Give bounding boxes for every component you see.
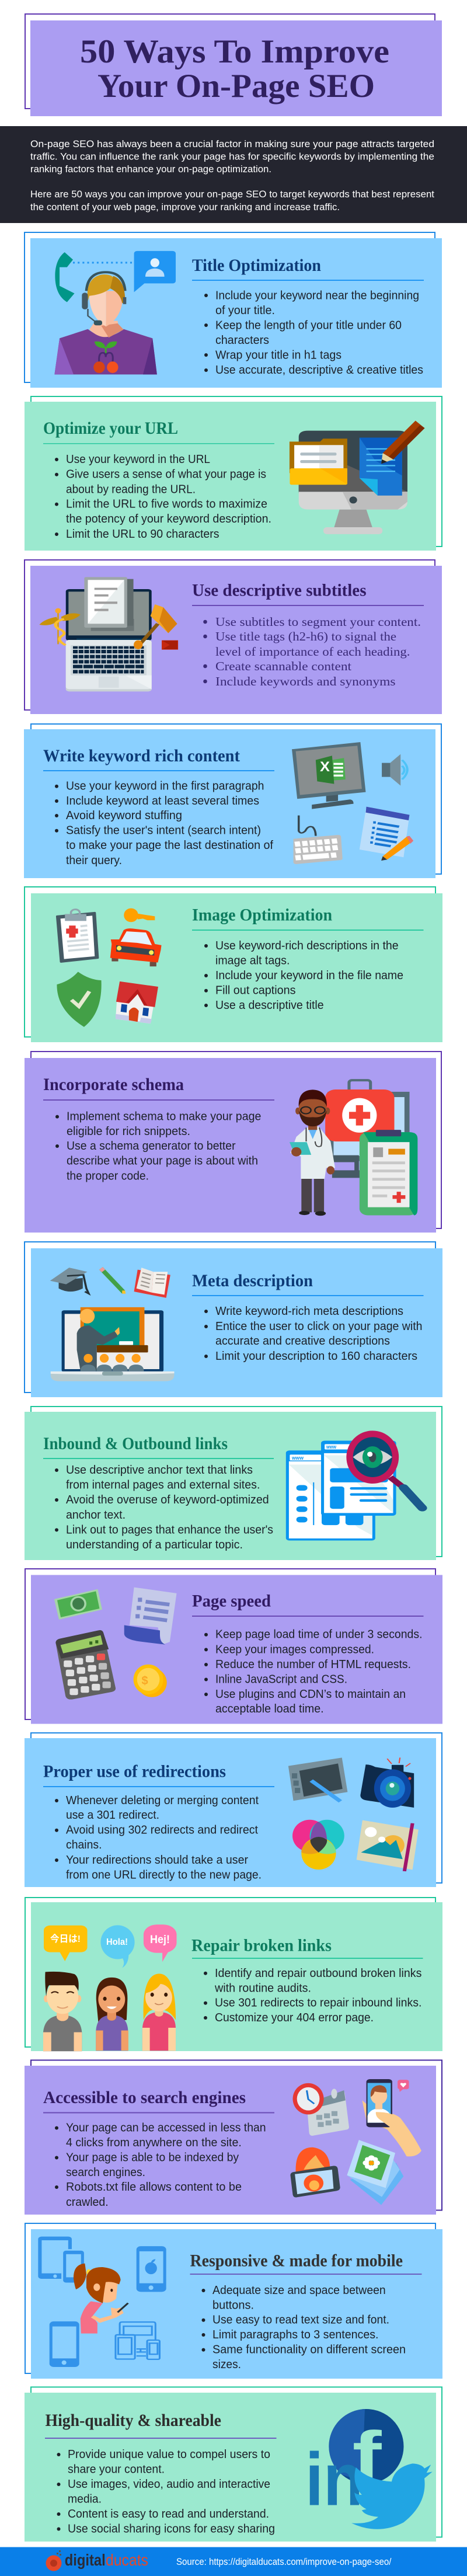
bullet list: Use images, video, audio and interactive [68,2478,270,2491]
bullet list: to make your page the last destination of [66,839,273,852]
icon: laptop with document, caduceus and gavel [39,577,178,691]
panel: Inbound & Outbound links [25,1407,442,1560]
icon labels: www [291,1444,337,1461]
panel: Repair broken links [25,1898,442,2051]
bullet list: Limit your description to 160 characters [215,1350,417,1363]
heading: Use descriptive subtitles [192,580,367,600]
bullet list: Use 301 redirects to repair inbound links. [215,1997,421,2010]
title: Your On-Page SEO [97,68,375,105]
bullet list: search engines. [66,2166,145,2179]
bullet list: of your title. [215,304,275,317]
title [80,33,389,105]
speech bubble text: 今日は! [50,1933,81,1944]
bullet list: about by reading the URL. [66,483,196,496]
bullet list [203,615,421,688]
bullet list: Avoid the overuse of keyword-optimized [66,1494,269,1506]
logo: digitalducats: ducats [106,2551,148,2569]
bullet list: Identify and repair outbound broken links [215,1967,421,1980]
bullet list: understanding of a particular topic. [66,1538,243,1551]
bullet list [55,1464,273,1551]
speech bubble text: Hej! [150,1934,170,1946]
bullet list: Customize your 404 error page. [215,2011,374,2024]
bullet list: sizes. [212,2358,241,2371]
bullet list: Entice the user to click on your page with [215,1320,423,1333]
bullet list: Give users a sense of what your page is [66,468,266,481]
bullet list: Use your keyword in the first paragraph [66,780,264,793]
heading: Accessible to search engines [43,2088,246,2107]
bullet list: image alt tags. [215,955,290,967]
icon: doctor with medical kit and clipboard [290,1080,417,1216]
footer bar [0,2547,467,2576]
bullet list [202,2284,406,2371]
bullet list: Adequate size and space between [212,2284,386,2297]
bullet list: Your page is able to be indexed by [66,2151,239,2164]
bullet list [55,2122,266,2209]
bullet list: Use plugins and CDN’s to maintain an [215,1688,406,1701]
intro text: the content of your web page, improve your ranking and increase traffic. [30,201,340,213]
bullet list [55,1111,261,1183]
bullet list: Inline JavaScript and CSS. [215,1673,347,1686]
header panel [25,14,442,116]
title: 50 Ways To Improve [80,33,389,70]
icon: three people with speech bubbles [43,1924,177,2051]
bullet list: chains. [66,1839,102,1851]
bullet list [204,1628,423,1715]
bullet list: Implement schema to make your page [67,1111,261,1123]
bullet list: Limit the URL to five words to maximize [66,498,267,511]
bullet list: eligible for rich snippets. [67,1125,190,1138]
bullet list: Use title tags (h2-h6) to signal the [215,629,396,643]
bullet list: acceptable load time. [215,1703,324,1715]
icon: money, receipt, calculator and coin [54,1588,177,1700]
icon: monitor, speaker, keyboard and notepad [292,742,413,864]
bullet list: with routine audits. [214,1982,311,1994]
heading: Repair broken links [191,1936,332,1955]
bullet list: Provide unique value to compel users to [68,2448,270,2461]
bullet list: Use keyword-rich descriptions in the [215,939,399,952]
bullet list [55,780,273,867]
heading: Proper use of redirections [43,1762,226,1781]
bullet list [204,289,423,377]
bullet list: Use a schema generator to better [67,1140,236,1153]
speech bubble text: Hola! [106,1937,128,1947]
bullet list: Limit paragraphs to 3 sentences. [212,2328,378,2341]
bullet list: Your redirections should take a user [66,1854,248,1867]
icon: monitor with folder, document and pencil [290,420,425,534]
heading: Inbound & Outbound links [43,1434,228,1453]
icon: support agent with phone [54,251,176,374]
icon: drawing tablet, camera, colour venn and picture [288,1757,419,1871]
bullet list: Use easy to read text size and font. [212,2314,389,2327]
panel: Title Optimization [25,232,442,388]
bullet list: Use your keyword in the URL [66,453,210,466]
intro band [0,126,467,223]
logo: digitalducats [46,2550,148,2571]
icon: girl with mobile devices [38,2237,166,2367]
panel: Optimize your URL [25,396,442,551]
bullet list: Content is easy to read and understand. [68,2508,269,2521]
bullet list: Include your keyword near the beginning [215,289,419,302]
icon: facebook, linkedin and twitter logos: in [305,2438,363,2522]
heading: High-quality & shareable [46,2411,221,2430]
panel: Responsive & made for mobile [25,2223,442,2379]
bullet list: characters [215,334,269,347]
panel: Write keyword rich content [24,724,441,878]
panel: Accessible to search engines [25,2060,442,2215]
bullet list: 4 clicks from anywhere on the site. [66,2136,242,2149]
bullet list: share your content. [68,2463,165,2476]
bullet list: the proper code. [67,1170,149,1183]
bullet list: from one URL directly to the new page. [66,1868,262,1881]
panel: Image Optimization [25,887,442,1042]
bullet list: Reduce the number of HTML requests. [215,1658,411,1671]
bullet list: Link out to pages that enhance the user's [66,1523,273,1536]
icon: facebook, linkedin and twitter logos [305,2409,433,2529]
bullet list: Avoid keyword stuffing [66,809,182,822]
bullet list: buttons. [212,2299,254,2312]
intro text: Here are 50 ways you can improve your on-page SEO to target keywords that best represent [30,189,434,200]
bullet list: media. [68,2493,102,2506]
heading: Page speed [192,1591,271,1610]
icon: dollar sign: $ [141,1675,148,1687]
intro text: On-page SEO has always been a crucial factor in making sure your page attracts targeted [30,138,434,149]
bullet list [204,939,403,1012]
bullet list: Whenever deleting or merging content [66,1794,259,1807]
bullet list: anchor text. [66,1509,126,1522]
bullet list: the potency of your keyword description. [66,513,271,525]
bullet list: Same functionality on different screen [212,2344,406,2356]
bullet list [57,2448,275,2535]
bullet list [204,1305,423,1363]
icon: browser windows with magnifying eye [286,1430,422,1541]
panel: Meta description [25,1242,442,1397]
icon: clipboard, key, car, shield and house [57,908,162,1027]
bullet list: Use accurate, descriptive & creative titles [215,364,423,377]
bullet list: Robots.txt file allows content to be [66,2181,242,2194]
bullet list: Keep your images compressed. [215,1643,374,1656]
heading: Write keyword rich content [43,746,240,765]
bullet list: Keep the length of your title under 60 [215,319,402,332]
icon: facebook, linkedin and twitter logos: f [353,2418,382,2495]
icon labels: www: www [326,1444,337,1450]
bullet list: Satisfy the user's intent (search intent) [66,824,261,837]
heading: Image Optimization [192,905,332,925]
panel: Proper use of redirections [25,1733,442,1887]
intro text: ranking factors that enhance your on-page optimization. [30,163,271,175]
bullet list: Limit the URL to 90 characters [66,528,219,541]
bullet list: crawled. [66,2196,109,2209]
logo: digitalducats: digital [65,2551,106,2569]
icon: excel letter: X [320,759,330,775]
bullet list [204,1967,421,2024]
heading: Title Optimization [192,256,321,275]
heading: Optimize your URL [43,419,178,438]
source text: Source: https://digitalducats.com/improve-on-page-seo/ [176,2556,392,2567]
bullet list: Include your keyword in the file name [215,969,403,982]
icon: clock, calendar, phone in hand and photos [290,2079,421,2205]
bullet list: use a 301 redirect. [66,1809,159,1822]
bullet list: Use a descriptive title [215,999,324,1012]
bullet list: from internal pages and external sites. [66,1479,260,1492]
bullet list: Include keyword at least several times [66,795,259,807]
bullet list [55,1794,262,1881]
panel: Incorporate schema [25,1052,441,1233]
bullet list: describe what your page is about with [67,1155,258,1168]
bullet list: Use subtitles to segment your content. [215,615,421,629]
bullet list: Write keyword-rich meta descriptions [215,1305,403,1318]
bullet list: level of importance of each heading. [215,645,410,659]
bullet list: their query. [66,854,122,867]
bullet list: Create scannable content [215,659,351,673]
bullet list: Avoid using 302 redirects and redirect [66,1824,258,1837]
panel: High-quality & shareable [25,2387,442,2542]
bullet list [55,453,271,541]
intro text [30,138,434,213]
speech bubble text [50,1933,170,1947]
bullet list: Use descriptive anchor text that links [66,1464,253,1477]
heading: Incorporate schema [43,1075,184,1094]
heading: Responsive & made for mobile [190,2251,403,2270]
bullet list: Fill out captions [215,984,296,997]
icon: graduation cap, pencil, book and online classroom laptop [50,1267,174,1381]
bullet list: Keep page load time of under 3 seconds. [215,1628,423,1641]
intro text: traffic. You can influence the rank your page has for specific keywords by implementing the [30,151,434,162]
bullet list: Wrap your title in h1 tags [215,349,341,361]
bullet list: Include keywords and synonyms [215,674,396,688]
bullet list: accurate and creative descriptions [215,1335,390,1348]
icon labels: www: www [291,1455,304,1461]
heading: Meta description [192,1271,313,1290]
bullet list: Your page can be accessed in less than [66,2122,266,2135]
panel: Page speed [25,1569,442,1724]
bullet list: Use social sharing icons for easy sharing [68,2522,275,2535]
panel: Use descriptive subtitles [25,560,442,714]
